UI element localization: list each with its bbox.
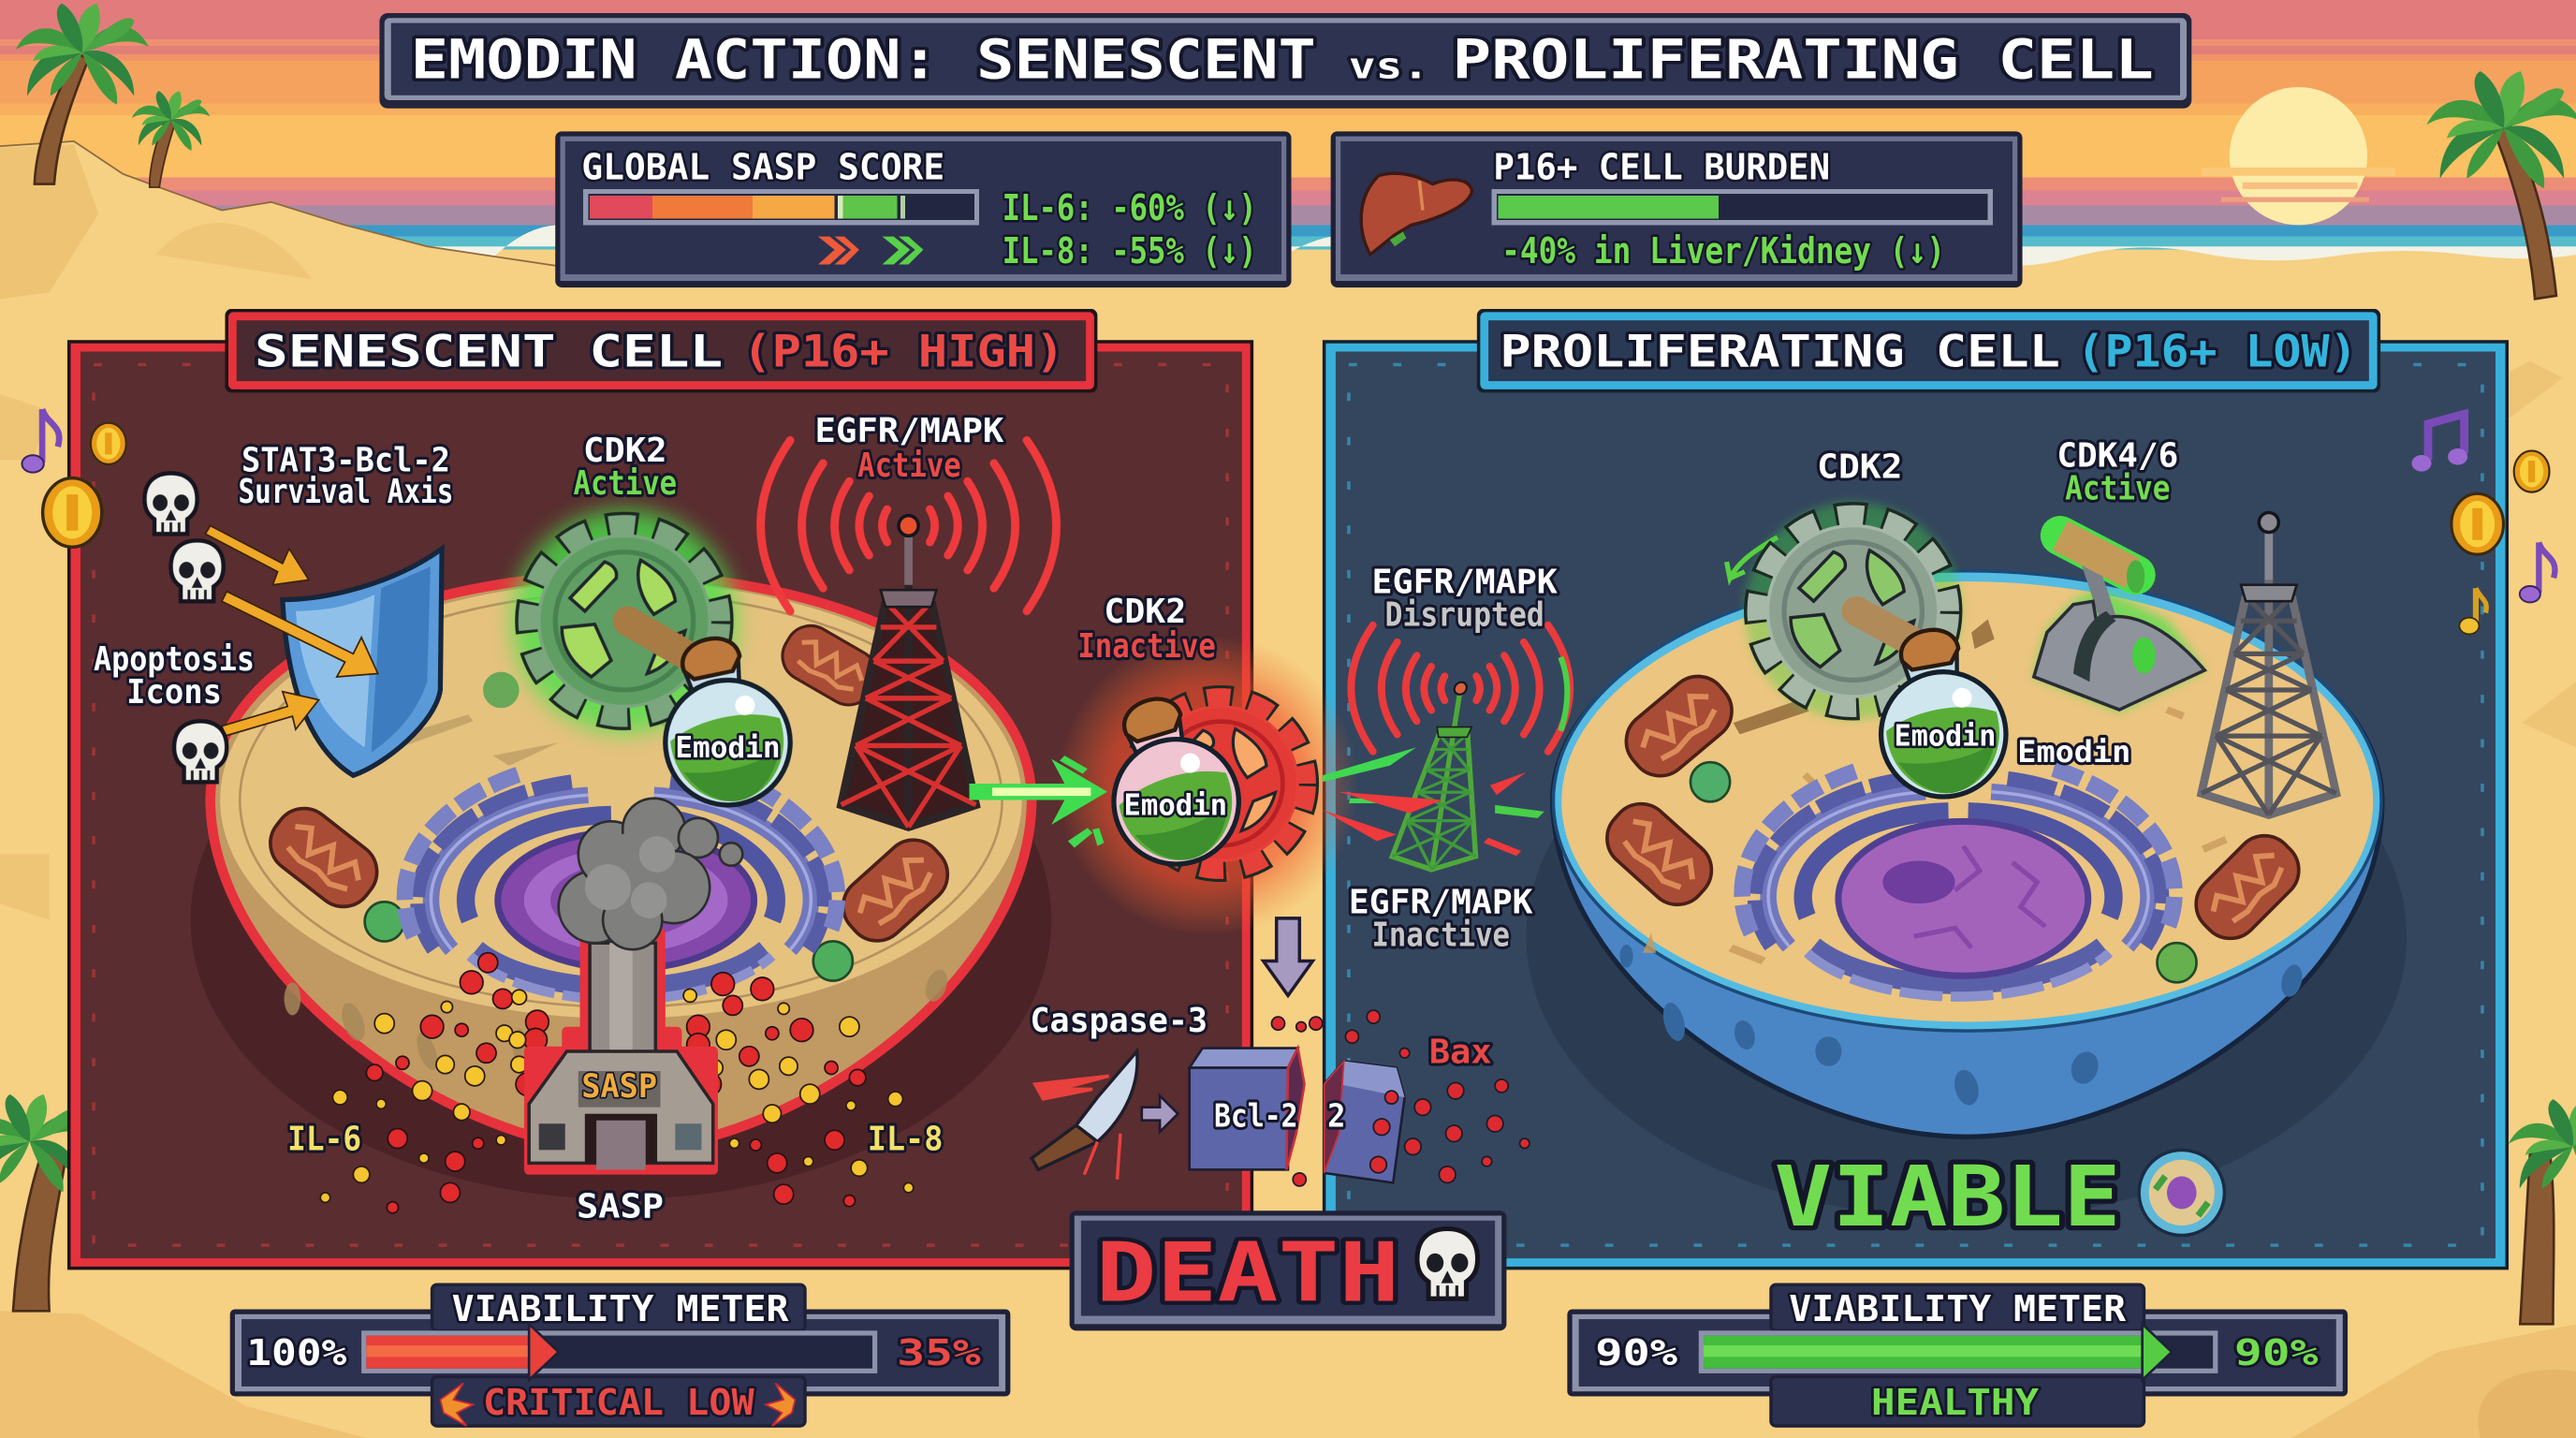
heading: P16: P16+ CELL BURDEN	[1493, 146, 1830, 188]
SASP factory	[529, 933, 713, 1169]
header: senescent	[225, 309, 1097, 392]
P16 change: -40% in Liver/Kidney (↓)	[1501, 230, 1945, 272]
label CDK2: CDK2	[1817, 448, 1902, 487]
label: Emodin	[675, 731, 781, 765]
organelle	[1690, 762, 1730, 801]
axle	[1856, 611, 1910, 640]
label: Emodin	[1895, 720, 1996, 754]
label active red: Active	[857, 447, 961, 485]
decorative coin small	[91, 423, 126, 464]
label on factory: SASP	[581, 1067, 657, 1106]
label EGFR inactive: EGFR/MAPK	[1349, 884, 1533, 922]
rim	[1553, 571, 2381, 1031]
Bcl-2 block left	[1190, 1049, 1305, 1169]
nucleus	[498, 831, 754, 969]
glow around gear	[513, 509, 736, 733]
IL-6 reduction: IL-6: -60% (↓)	[1003, 187, 1257, 229]
cell pits	[1620, 945, 2305, 1108]
organelle right	[2157, 943, 2197, 982]
mitochondrion upper	[1615, 665, 1744, 787]
smoke	[559, 799, 742, 949]
mitochondrion upper	[773, 617, 886, 714]
header: proliferating	[1477, 309, 2380, 392]
disrupted tower	[1351, 625, 1570, 872]
heading text: PROLIFERATING CELL	[1500, 326, 2060, 377]
label Bax: Bax	[1429, 1033, 1492, 1071]
title text: EMODIN ACTION: SENESCENT	[411, 27, 1316, 91]
shield and apoptosis arrows	[205, 526, 442, 775]
icon: active green gear	[529, 526, 720, 716]
right value: 90%	[2234, 1332, 2318, 1374]
foam	[0, 218, 2576, 292]
left value: 100%	[246, 1332, 346, 1374]
palm tree right	[2426, 71, 2576, 299]
icon: rotation arrow	[1727, 537, 1778, 579]
mitochondrion right	[2184, 824, 2311, 950]
panel: global SASP score	[555, 131, 1292, 287]
icon: signal waves	[761, 440, 1057, 611]
music note yellow	[2459, 588, 2486, 634]
SASP particles	[366, 953, 866, 1213]
viability meter: senescent	[230, 1284, 1010, 1426]
viability meter: proliferating	[1567, 1284, 2348, 1426]
label icons: Icons	[126, 673, 222, 712]
label CDK2: CDK2	[1104, 593, 1186, 631]
icon: Emodin flask	[1086, 682, 1254, 880]
status: HEALTHY	[1871, 1382, 2040, 1424]
golgi	[405, 772, 837, 1000]
cell pits	[285, 698, 951, 1073]
meter heading: VIABILITY METER	[1789, 1288, 2127, 1330]
organelle upper	[483, 672, 520, 708]
icon: skull	[1417, 1229, 1478, 1299]
panel: P16+ cell burden	[1331, 131, 2023, 287]
green spark right	[1495, 805, 1544, 818]
meter bar	[1699, 1324, 2217, 1380]
icon: skull 2	[171, 540, 224, 601]
cell shadow	[1526, 653, 2407, 1219]
arrows: red signal	[1323, 772, 1526, 856]
death text: DEATH	[1096, 1225, 1399, 1321]
arrow: down	[1264, 918, 1312, 995]
SASP score bar	[583, 189, 979, 225]
sparks	[1060, 747, 1416, 847]
label active: Active	[2065, 469, 2170, 507]
label STAT3: STAT3-Bcl-2	[242, 442, 450, 480]
label EGFR disrupted: EGFR/MAPK	[1372, 563, 1558, 601]
label IL-8: IL-8	[868, 1120, 943, 1158]
label EGFR: EGFR/MAPK	[815, 412, 1004, 450]
label SASP: SASP	[577, 1187, 664, 1225]
panel: death	[1070, 1211, 1506, 1330]
mitochondrion	[1595, 792, 1723, 917]
palm tree small	[132, 91, 211, 187]
palm tree bottom right	[2509, 1099, 2576, 1324]
proliferating cell body	[1553, 572, 2382, 1137]
label 2: 2	[1327, 1098, 1345, 1136]
mitochondrion right	[831, 828, 959, 953]
icon: liver	[1361, 173, 1472, 255]
organelle	[365, 902, 404, 941]
coin right large	[2452, 493, 2503, 554]
cell top surface	[1561, 581, 2373, 1021]
label emodin: Emodin	[1123, 788, 1227, 822]
icon: skull 1	[144, 473, 198, 534]
label IL-6: IL-6	[287, 1120, 361, 1158]
P16 burden bar	[1492, 189, 1993, 225]
cell top surface	[220, 581, 1022, 1019]
label Bcl-2: Bcl-2	[1214, 1098, 1298, 1136]
arrow: small	[1142, 1095, 1178, 1132]
meter heading: VIABILITY METER	[452, 1288, 789, 1330]
music note right double	[2411, 414, 2467, 472]
palm tree bottom left	[0, 1094, 94, 1311]
label apoptosis: Apoptosis	[94, 640, 255, 679]
icon: skull 3	[174, 721, 227, 782]
heading: global SASP: GLOBAL SASP SCORE	[581, 146, 944, 188]
glow around gear	[1745, 503, 1962, 720]
label inactive: Inactive	[1372, 917, 1510, 955]
panel: senescent cell	[67, 340, 1253, 1269]
decorative coin large	[43, 478, 102, 547]
flames	[440, 1383, 795, 1426]
cell shadow	[191, 640, 1051, 1199]
title banner	[379, 13, 2191, 109]
icon: Emodin flask	[1864, 620, 2016, 807]
icon: lever	[2034, 536, 2204, 712]
Bcl-2 block right	[1325, 1062, 1405, 1182]
right value: 35%	[897, 1332, 981, 1374]
label inactive: Inactive	[1077, 627, 1216, 666]
icon: grey tower	[2202, 512, 2336, 818]
arrow: emodin green	[970, 759, 1107, 825]
label survival: Survival Axis	[238, 473, 453, 511]
title right: PROLIFERATING CELL	[1453, 27, 2154, 91]
left value: 90%	[1595, 1332, 1677, 1374]
chevrons green	[882, 237, 923, 265]
icon: healthy cell	[2139, 1150, 2224, 1236]
icon: grey gear	[1758, 516, 1949, 707]
title vs: vs.	[1349, 45, 1429, 87]
music note right	[2520, 542, 2554, 602]
senescent cell body	[211, 575, 1032, 1150]
label active: Active	[574, 464, 677, 503]
status: CRITICAL LOW	[483, 1382, 754, 1424]
palm tree top left	[16, 4, 149, 184]
label Emodin: Emodin	[2017, 734, 2130, 770]
centre: inactive CDK2	[1057, 593, 1358, 936]
coin right small	[2514, 450, 2550, 492]
icon: knife	[1032, 1051, 1137, 1180]
surface specks	[1643, 620, 2228, 964]
label disrupted: Disrupted	[1385, 596, 1544, 635]
axle	[627, 621, 690, 657]
heading tag: (P16+ HIGH)	[742, 326, 1064, 377]
meter bar	[361, 1324, 877, 1380]
nucleus	[1838, 821, 2088, 976]
label CDK2: CDK2	[583, 432, 667, 470]
SASP yellow particles	[320, 989, 914, 1202]
organelle right	[813, 941, 853, 981]
IL-8 reduction: IL-8: -55% (↓)	[1003, 230, 1257, 272]
icon: Emodin flask	[645, 626, 802, 816]
icon: active tower	[842, 516, 976, 830]
golgi	[1742, 769, 2174, 997]
heading text: SENESCENT CELL	[255, 326, 723, 377]
mitochondrion	[258, 797, 388, 918]
music note left	[22, 409, 59, 473]
Bax particles	[1271, 1010, 1530, 1186]
chevrons red	[818, 237, 859, 265]
sun	[2202, 87, 2395, 225]
rim line	[240, 593, 1003, 1007]
label caspase: Caspase-3	[1030, 1002, 1208, 1040]
heading tag: (P16+ LOW)	[2076, 326, 2358, 377]
VIABLE label: VIABLE	[1775, 1149, 2121, 1246]
label CDK46: CDK4/6	[2056, 436, 2178, 475]
panel: proliferating cell	[1323, 340, 2509, 1269]
